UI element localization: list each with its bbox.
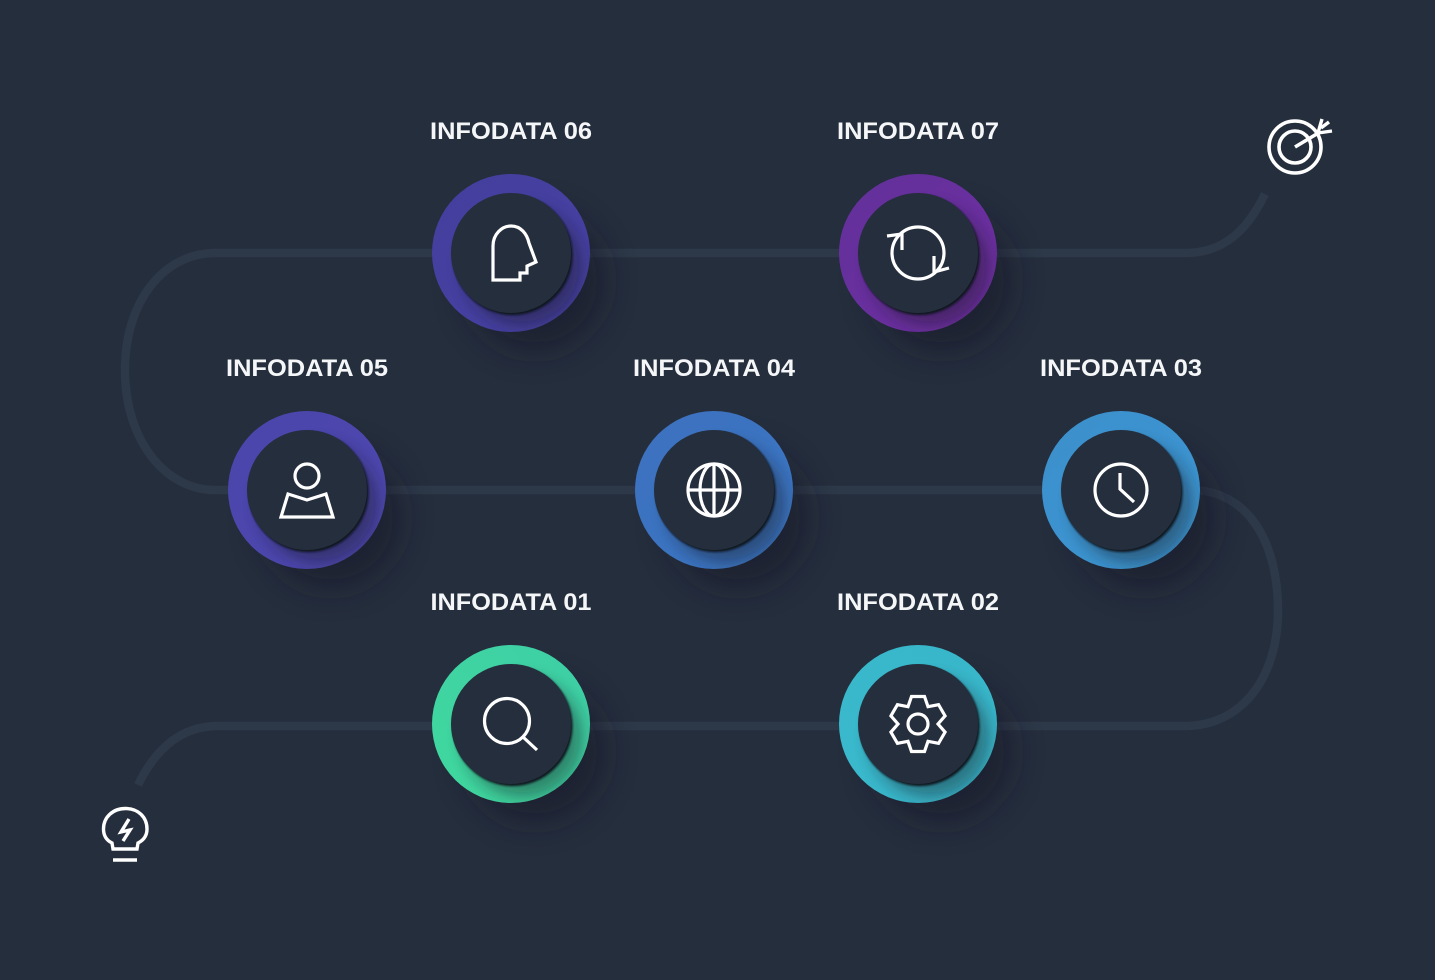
ring 03 <box>1042 411 1200 569</box>
icon: person on map <box>281 464 333 517</box>
infographic canvas <box>102 118 1332 862</box>
label 03: INFODATA 03 <box>1040 355 1202 382</box>
ring 02 <box>839 645 997 803</box>
node: infodata 02 <box>837 589 1014 824</box>
winding road path <box>125 194 1278 785</box>
ring 07 <box>839 174 997 332</box>
label 06: INFODATA 06 <box>430 118 592 145</box>
label 02: INFODATA 02 <box>837 589 999 616</box>
node: infodata 04 <box>633 355 810 590</box>
ring 04 <box>635 411 793 569</box>
icon: gear <box>891 696 945 752</box>
icon: head <box>493 226 536 280</box>
ring 06 <box>432 174 590 332</box>
node: infodata 07 <box>837 118 1014 353</box>
icon: clock <box>1095 464 1147 516</box>
node: infodata 05 <box>226 355 403 590</box>
icon: target goal <box>1269 119 1332 173</box>
icon: globe <box>688 464 740 516</box>
icon: cycle arrows <box>887 227 949 279</box>
icon: magnifier <box>484 698 537 750</box>
label 07: INFODATA 07 <box>837 118 999 145</box>
label 05: INFODATA 05 <box>226 355 388 382</box>
label 01: INFODATA 01 <box>430 589 592 616</box>
ring 05 <box>228 411 386 569</box>
node: infodata 06 <box>430 118 607 353</box>
label 04: INFODATA 04 <box>633 355 796 382</box>
icon: light bulb start <box>104 808 147 860</box>
node: infodata 01 <box>430 589 607 824</box>
node: infodata 03 <box>1040 355 1217 590</box>
ring 01 <box>432 645 590 803</box>
